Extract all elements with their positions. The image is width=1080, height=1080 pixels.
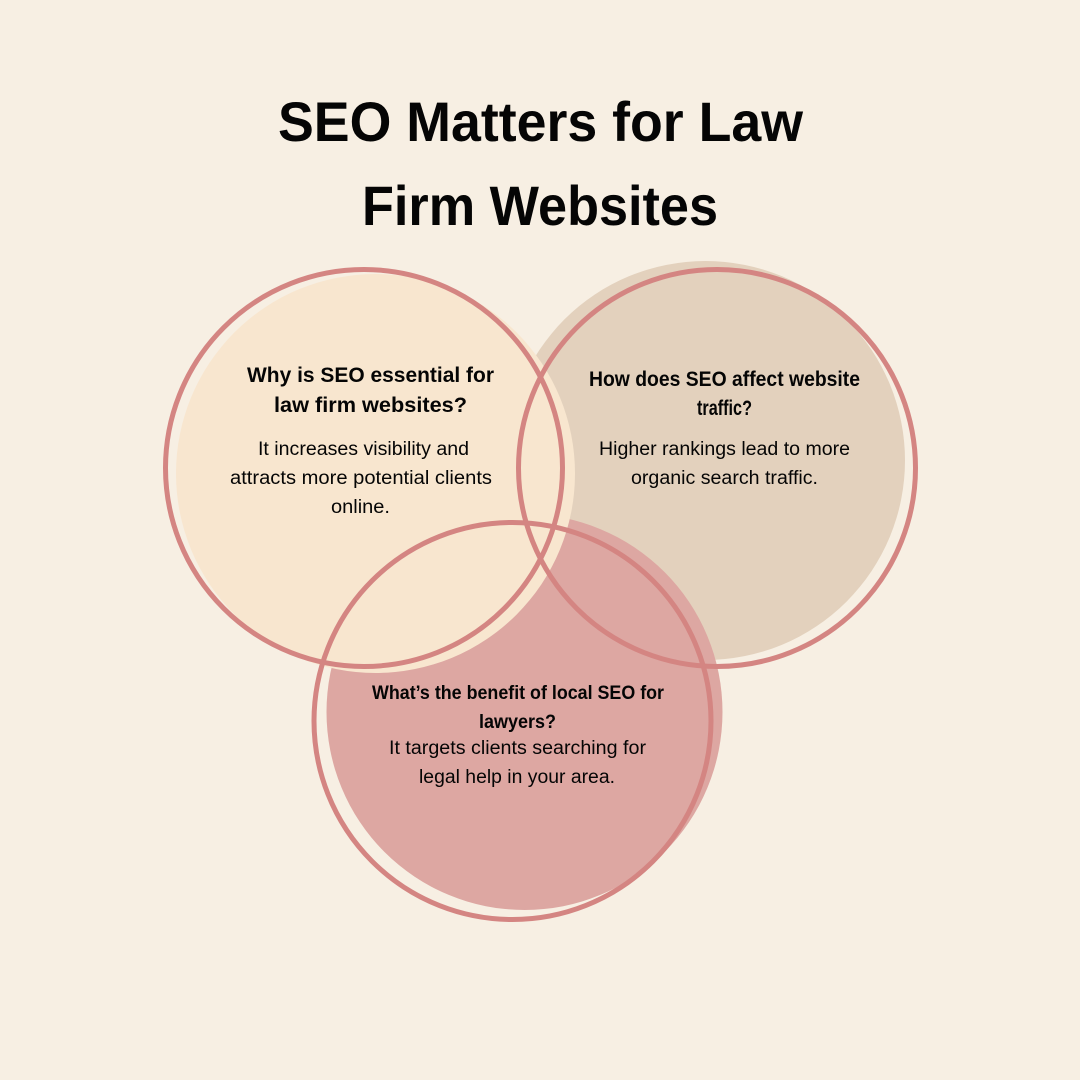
text block: local SEO benefit bbox=[372, 683, 665, 788]
text block: why SEO is essential bbox=[230, 363, 495, 518]
filled circle: traffic (beige) bbox=[506, 261, 905, 660]
text block: why SEO is essential: It increases visibility and bbox=[258, 439, 469, 460]
filled circle: essential (cream) bbox=[176, 274, 575, 673]
text block: local SEO benefit: It targets clients searching for bbox=[389, 738, 647, 759]
text block: website traffic: organic search traffic. bbox=[631, 468, 818, 489]
title: SEO Matters for Law bbox=[278, 90, 803, 153]
text block: why SEO is essential: Why is SEO essential for bbox=[247, 363, 495, 387]
text block: website traffic: Higher rankings lead to more bbox=[599, 439, 850, 460]
text block: why SEO is essential: online. bbox=[331, 497, 390, 518]
title bbox=[278, 90, 803, 237]
text block: website traffic: traffic? bbox=[697, 396, 752, 420]
text block: website traffic: How does SEO affect website bbox=[589, 367, 860, 391]
text block: website traffic bbox=[589, 367, 860, 489]
outline rings bbox=[166, 270, 916, 920]
text block: why SEO is essential: attracts more potential clients bbox=[230, 468, 492, 489]
title: Firm Websites bbox=[362, 174, 718, 237]
text block: local SEO benefit: lawyers? bbox=[479, 712, 556, 733]
filled circle: local SEO (pink) bbox=[326, 514, 722, 910]
text block: local SEO benefit: legal help in your area. bbox=[419, 767, 615, 788]
text block: why SEO is essential: law firm websites? bbox=[274, 393, 467, 417]
text block: local SEO benefit: What’s the benefit of local SEO for bbox=[372, 683, 665, 704]
